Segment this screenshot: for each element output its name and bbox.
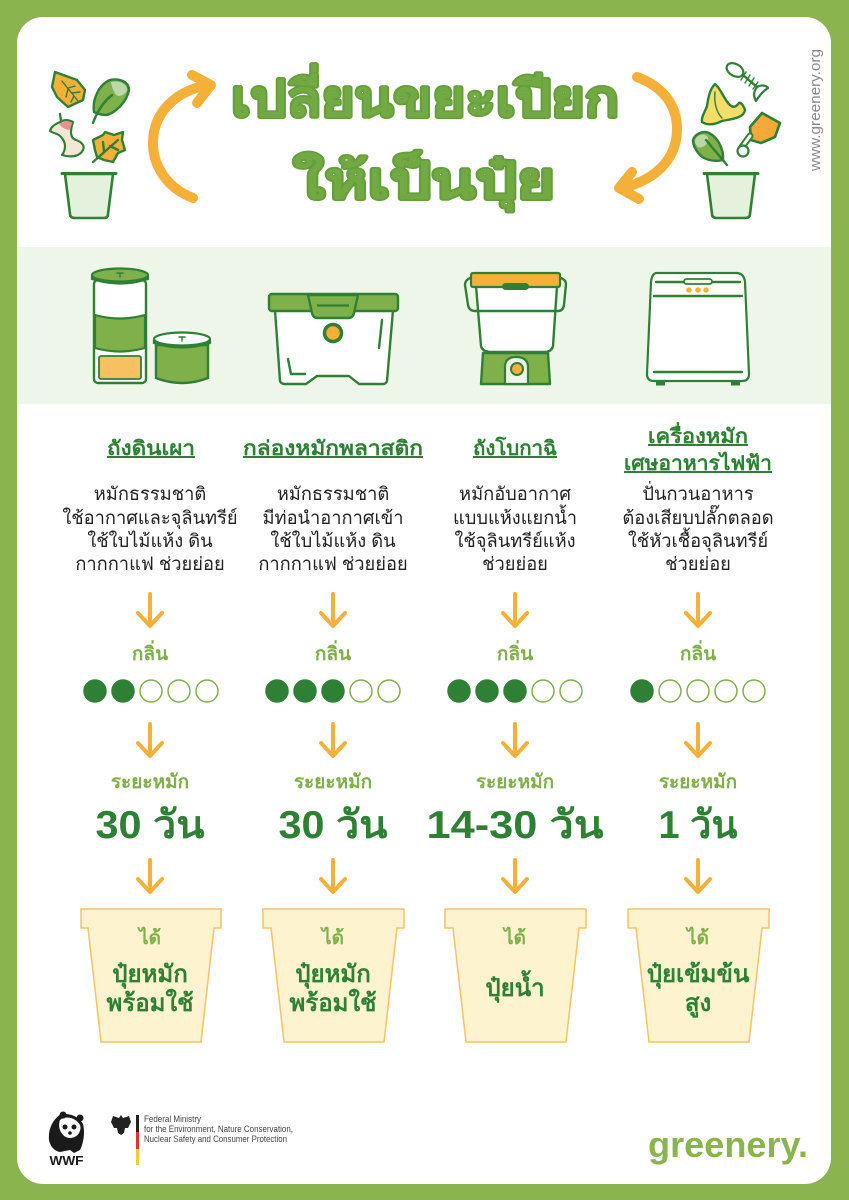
title: เปลี่ยนขยะเปียก — [231, 64, 619, 127]
arrow — [138, 860, 162, 892]
column 2: plastic box — [243, 438, 423, 1042]
smell rating 3 of 5 — [266, 680, 400, 702]
panda face — [59, 1118, 81, 1138]
ministry text: for the Environment, Nature Conservation, — [144, 1124, 293, 1134]
description: ใช้ใบไม้แห้ง ดิน — [270, 530, 396, 551]
duration value: 14-30 วัน — [426, 804, 604, 847]
pot text: พร้อมใช้ — [290, 988, 376, 1017]
icon: clay pots — [92, 268, 210, 383]
description: กากกาแฟ ช่วยย่อย — [258, 553, 408, 574]
description: หมักธรรมชาติ — [277, 483, 389, 504]
description: ช่วยย่อย — [665, 553, 731, 574]
pot result — [628, 909, 769, 1042]
smell rating 1 of 5 — [631, 680, 765, 702]
right curved arrow — [619, 77, 677, 199]
pot text: ได้ — [502, 926, 526, 949]
flag stripe — [136, 1115, 139, 1165]
light green band — [17, 247, 831, 404]
pot text: ปุ๋ยเข้มข้น — [647, 961, 750, 990]
duration label: ระยะหมัก — [294, 772, 372, 793]
greenery logo: greenery. — [648, 1124, 808, 1165]
description: ช่วยย่อย — [482, 553, 548, 574]
panda body — [49, 1114, 84, 1153]
pot text: พร้อมใช้ — [107, 988, 193, 1017]
smell rating 3 of 5 — [448, 680, 582, 702]
pot text: ปุ๋ยหมัก — [112, 961, 188, 990]
duration label: ระยะหมัก — [476, 772, 554, 793]
WWF wordmark: WWF — [50, 1153, 84, 1168]
heading line 2: เศษอาหารไฟฟ้า — [624, 451, 772, 475]
ministry text — [144, 1114, 293, 1144]
icon: right food scraps and bin — [693, 60, 780, 218]
description: ใช้หัวเชื้อจุลินทรีย์ — [628, 527, 768, 553]
heading: ถังโบกาฉิ — [473, 436, 557, 460]
pot text: ได้ — [320, 926, 344, 949]
pot text: ปุ๋ยหมัก — [295, 961, 371, 990]
duration label: ระยะหมัก — [111, 772, 189, 793]
heading: ถังดินเผา — [107, 438, 195, 460]
duration label: ระยะหมัก — [659, 772, 737, 793]
icon: yellow leaf — [93, 132, 125, 162]
icon: electric composter — [647, 273, 749, 386]
arrow — [503, 860, 527, 892]
smell rating 2 of 5 — [84, 680, 218, 702]
icon: spinach leaf — [93, 79, 129, 123]
pot text — [647, 926, 750, 1018]
description: หมักธรรมชาติ — [94, 483, 206, 504]
pot text: ปุ๋ยน้ำ — [485, 969, 545, 1004]
German federal ministry logo — [111, 1114, 293, 1165]
smell label: กลิ่น — [680, 640, 716, 665]
pot result — [263, 909, 404, 1042]
heading: กล่องหมักพลาสติก — [243, 438, 423, 460]
icon: bokashi bucket — [465, 273, 566, 384]
arrow — [321, 860, 345, 892]
icon: fish bone — [724, 60, 768, 101]
arrow — [321, 594, 345, 626]
duration value: 1 วัน — [658, 804, 738, 847]
ministry text: Federal Ministry — [144, 1114, 201, 1124]
description: ปั่นกวนอาหาร — [642, 481, 754, 504]
arrow — [138, 594, 162, 626]
column 4: electric composter — [622, 421, 774, 1042]
icon: autumn leaf — [52, 72, 85, 107]
icon: bin — [704, 174, 758, 218]
icon: eagle — [111, 1115, 131, 1135]
heading: เครื่องหมัก — [648, 421, 748, 448]
duration value: 30 วัน — [278, 804, 388, 847]
smell label: กลิ่น — [315, 640, 351, 665]
icon: chicken drumstick — [738, 113, 780, 156]
icon: plastic compost box — [269, 294, 398, 384]
arrow — [686, 724, 710, 756]
description: หมักอับอากาศ — [459, 483, 571, 504]
pot text: ได้ — [137, 926, 161, 949]
arrow — [686, 594, 710, 626]
website label: www.greenery.org — [807, 49, 824, 172]
pot text: ได้ — [685, 926, 709, 949]
pot text: สูง — [685, 990, 711, 1018]
arrow — [138, 724, 162, 756]
title: ให้เป็นปุ๋ย — [293, 150, 555, 212]
icon: apple core — [50, 114, 84, 156]
description: กากกาแฟ ช่วยย่อย — [75, 553, 225, 574]
WWF logo — [49, 1112, 84, 1168]
icon: bin — [62, 174, 116, 218]
arrow — [503, 724, 527, 756]
icon: left food scraps and bin — [50, 72, 129, 218]
pot result — [81, 909, 221, 1042]
left curved arrow — [153, 75, 211, 198]
smell label: กลิ่น — [497, 640, 533, 665]
pot text — [485, 926, 545, 1004]
pot text — [290, 926, 376, 1017]
description: แบบแห้งแยกน้ำ — [453, 504, 577, 528]
icon: banana peel — [702, 84, 745, 124]
description: ใช้อากาศและจุลินทรีย์ — [62, 507, 238, 530]
smell label: กลิ่น — [132, 640, 168, 665]
description: ใช้จุลินทรีย์แห้ง — [454, 530, 576, 553]
column 3: bokashi — [426, 436, 604, 1042]
arrow — [321, 724, 345, 756]
icon: spinach leaf — [693, 132, 727, 165]
arrow — [686, 860, 710, 892]
ministry text: Nuclear Safety and Consumer Protection — [144, 1134, 287, 1144]
description: ใช้ใบไม้แห้ง ดิน — [87, 530, 213, 551]
title — [231, 64, 619, 212]
pot text — [107, 926, 193, 1017]
pot result — [445, 909, 586, 1042]
column 1: clay pot — [62, 438, 238, 1042]
description: มีท่อนำอากาศเข้า — [262, 507, 404, 528]
arrow — [503, 594, 527, 626]
duration value: 30 วัน — [96, 804, 205, 847]
description: ต้องเสียบปลั๊กตลอด — [622, 504, 774, 528]
